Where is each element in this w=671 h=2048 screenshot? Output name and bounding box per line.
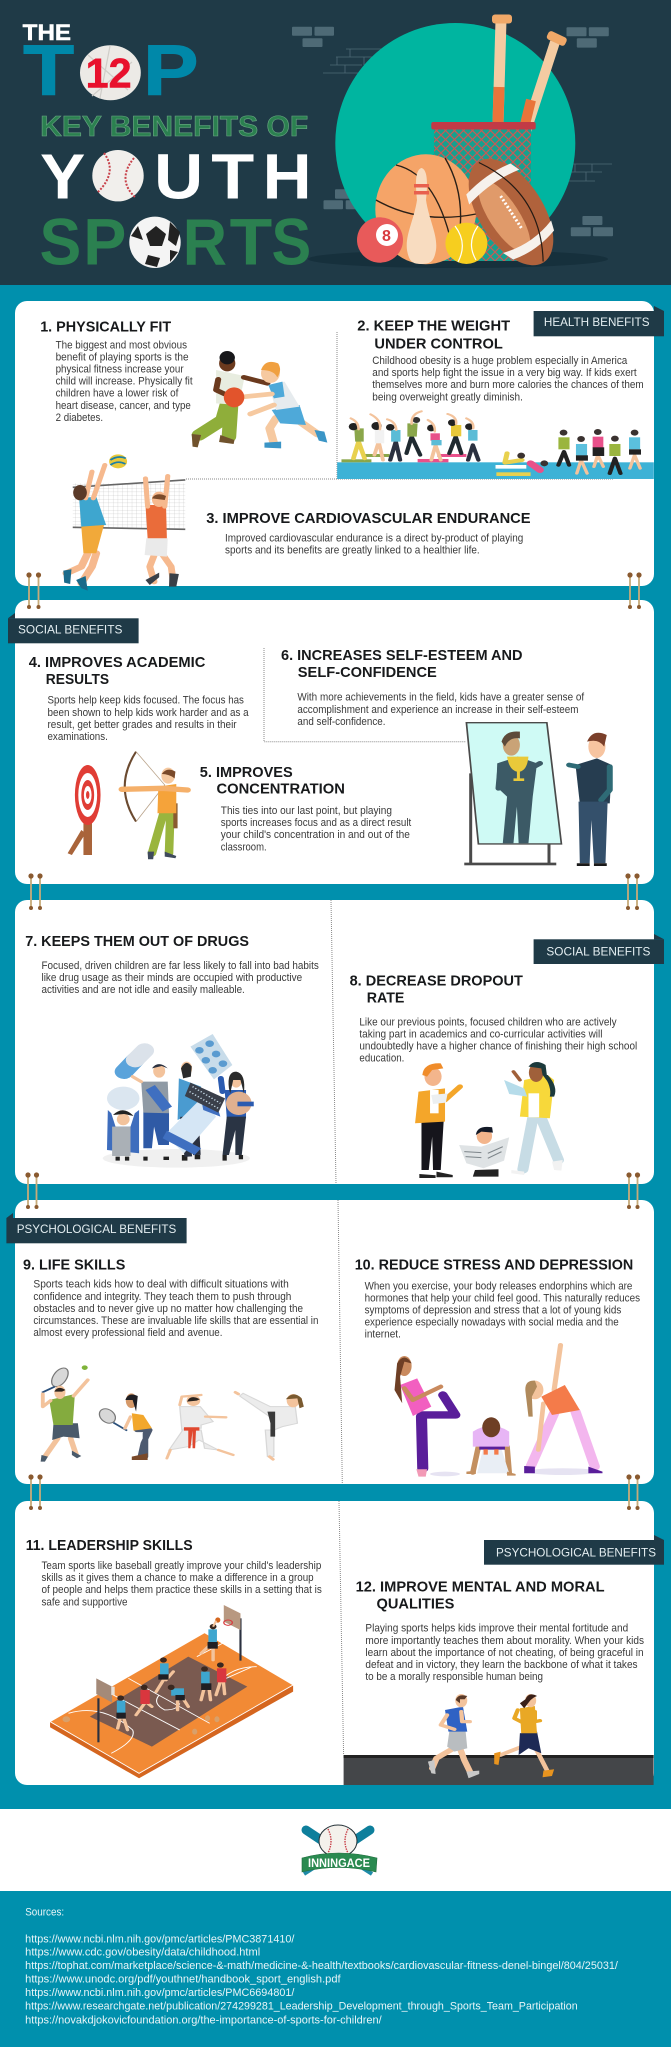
section tag: social benefits: SOCIAL BENEFITS bbox=[546, 945, 650, 959]
panel: health benefits bbox=[15, 301, 664, 591]
benefit 2 text: Childhood obesity is a huge problem especially in America bbox=[372, 355, 627, 367]
benefit 7 text bbox=[42, 960, 319, 996]
benefit 1 text: physical fitness increase your bbox=[56, 364, 184, 376]
benefit 6 text: and self-confidence. bbox=[297, 716, 386, 728]
benefit 4 text: result, get better grades and results in their bbox=[48, 719, 237, 731]
benefit 11 text: of people and helps them practice these skills in a setting that is bbox=[42, 1584, 322, 1596]
header background bbox=[0, 0, 671, 285]
panel: psychological benefits, 9 and 10 bbox=[6, 1200, 654, 1484]
benefit 4 heading bbox=[29, 654, 206, 688]
sources list: https://www.researchgate.net/publication/274299281_Leadership_Development_through_Sports_Team_Participation bbox=[25, 2001, 578, 2013]
title word: YOUTH: T bbox=[211, 141, 254, 213]
benefit 9 text: obstacles and to never give up no matter how challenging the bbox=[33, 1303, 303, 1315]
benefit 7 text: activities and are not idle and easily malleable. bbox=[42, 984, 245, 996]
benefit 10 heading: 10. REDUCE STRESS AND DEPRESSION bbox=[355, 1256, 633, 1273]
illustration: children stretching bbox=[395, 1345, 602, 1477]
wall bricks bbox=[292, 27, 613, 236]
benefit 10 text bbox=[365, 1280, 641, 1341]
benefit 5 text: your child's concentration in and out of the bbox=[221, 829, 410, 841]
benefit 4 text: Sports help keep kids focused. The focus has bbox=[48, 695, 244, 707]
sources footer bbox=[0, 1891, 671, 2047]
benefit 12 heading: 12. IMPROVE MENTAL AND MORAL bbox=[356, 1578, 605, 1595]
illustration: people carrying medication bbox=[103, 1034, 254, 1168]
benefit 8 text: education. bbox=[359, 1053, 404, 1065]
illustration: volleyball players bbox=[63, 454, 185, 591]
title word: YOUTH: H bbox=[263, 141, 312, 213]
title word: SPORTS bbox=[40, 205, 311, 279]
benefit 8 heading bbox=[350, 973, 523, 1007]
benefit 5 text: sports increases focus and as a direct result bbox=[221, 817, 411, 829]
benefit 1 text: The biggest and most obvious bbox=[56, 339, 188, 351]
illustration: group exercise on blue floor bbox=[337, 411, 654, 479]
benefit 1 text: benefit of playing sports is the bbox=[56, 351, 189, 363]
benefit 5 heading: 5. IMPROVES bbox=[200, 764, 293, 781]
benefit 8 text bbox=[359, 1016, 637, 1065]
benefit 9 text: circumstances. These are invaluable life skills that are essential in bbox=[33, 1315, 318, 1327]
title word: TOP: P bbox=[143, 32, 199, 111]
sources list: https://www.ncbi.nlm.nih.gov/pmc/articles/PMC6694801/ bbox=[25, 1987, 294, 1999]
section tag: psychological benefits bbox=[484, 1535, 664, 1565]
benefit 11 text: safe and supportive bbox=[42, 1596, 128, 1608]
benefit 5 heading bbox=[200, 764, 345, 798]
benefit 9 text: confidence and integrity. They teach them to push through bbox=[33, 1291, 291, 1303]
sources list bbox=[25, 1934, 618, 2026]
sources heading: Sources: bbox=[25, 1907, 64, 1919]
illustration: archer and target bbox=[68, 752, 187, 859]
panel: social benefits, 4 to 6 bbox=[8, 600, 654, 884]
benefit 12 text: to be a morally responsible human being bbox=[365, 1671, 543, 1683]
title word: TOP: 12 bbox=[86, 49, 132, 96]
sources list: https://www.unodc.org/pdf/youthnet/handbook_sport_english.pdf bbox=[25, 1974, 341, 1986]
benefit 9 text: Sports teach kids how to deal with difficult situations with bbox=[33, 1279, 289, 1291]
title word: YOUTH: U bbox=[154, 141, 203, 213]
benefit 5 text: This ties into our last point, but playing bbox=[221, 805, 392, 817]
basketball bbox=[375, 154, 476, 264]
logo: Inningace bbox=[302, 1825, 377, 1874]
illustration: isometric basketball court bbox=[50, 1605, 293, 1778]
main teal background bbox=[0, 285, 671, 1809]
benefit 1 text: 2 diabetes. bbox=[56, 412, 103, 424]
benefit 12 text: defeat and in victory, they learn the backbone of what it takes bbox=[365, 1659, 638, 1671]
benefit 7 heading: 7. KEEPS THEM OUT OF DRUGS bbox=[25, 933, 249, 950]
benefit 8 text: taking part in academics and co-curricular activities will bbox=[359, 1028, 602, 1040]
sources list: https://novakdjokovicfoundation.org/the-importance-of-sports-for-children/ bbox=[25, 2014, 382, 2026]
section tag: social benefits: SOCIAL BENEFITS bbox=[18, 622, 122, 636]
section tag: psychological benefits: PSYCHOLOGICAL BENEFITS bbox=[496, 1546, 656, 1560]
benefit 12 heading bbox=[356, 1578, 605, 1612]
benefit 6 heading: 6. INCREASES SELF-ESTEEM AND bbox=[281, 647, 523, 664]
benefit 11 text: skills as it gives them a chance to make a difference in a group bbox=[42, 1572, 314, 1584]
benefit 2 text bbox=[372, 355, 644, 403]
benefit 12 text: learn about the importance of not cheating, of being graceful in bbox=[365, 1647, 644, 1659]
benefit 12 heading: QUALITIES bbox=[376, 1595, 454, 1612]
benefit 5 text bbox=[221, 805, 411, 853]
benefit 12 text: more importantly teaches them about morality. When your kids bbox=[365, 1635, 645, 1647]
title word: TOP bbox=[23, 32, 199, 111]
benefit 1 text bbox=[56, 339, 193, 424]
illustration: tennis and karate kids bbox=[41, 1365, 304, 1462]
binder rings between panels bbox=[25, 572, 642, 1510]
benefit 9 text bbox=[33, 1279, 318, 1339]
running track ground bbox=[344, 1755, 654, 1785]
illustration: kids reading bbox=[415, 1062, 563, 1178]
title line: KEY BENEFITS OF: KEY BENEFITS OF bbox=[40, 111, 308, 143]
benefit 3 heading: 3. IMPROVE CARDIOVASCULAR ENDURANCE bbox=[206, 510, 531, 527]
benefit 2 text: being overweight greatly diminish. bbox=[372, 391, 523, 403]
benefit 5 heading: CONCENTRATION bbox=[216, 781, 345, 798]
benefit 6 heading bbox=[281, 647, 523, 681]
benefit 10 text: internet. bbox=[365, 1329, 401, 1341]
benefit 8 text: undoubtedly have a higher chance of finishing their high school bbox=[359, 1040, 637, 1052]
benefit 3 text: sports and its benefits are greatly linked to a healthier life. bbox=[225, 545, 480, 557]
benefit 6 heading: SELF-CONFIDENCE bbox=[298, 664, 437, 681]
benefit 7 text: Focused, driven children are far less likely to fall into bad habits bbox=[42, 960, 319, 972]
benefit 4 heading: RESULTS bbox=[46, 671, 109, 688]
benefit 2 heading: UNDER CONTROL bbox=[374, 335, 503, 352]
benefit 4 text bbox=[48, 695, 249, 743]
title word: YOUTH bbox=[40, 141, 312, 213]
bowling pin bbox=[407, 168, 436, 264]
tennis ball bbox=[445, 223, 487, 264]
benefit 10 text: symptoms of depression and stress that a lot of young kids bbox=[365, 1304, 622, 1316]
benefit 9 text: almost every professional field and avenue. bbox=[33, 1327, 223, 1339]
benefit 1 text: children have a lower risk of bbox=[56, 388, 179, 400]
benefit 8 heading: RATE bbox=[367, 990, 404, 1007]
benefit 2 text: and sports help fight the issue in a very big way. If kids exert bbox=[372, 367, 637, 379]
section tag: health benefits bbox=[534, 306, 664, 336]
football bbox=[451, 144, 571, 280]
benefit 4 text: examinations. bbox=[48, 731, 108, 743]
section tag: psychological benefits bbox=[6, 1213, 187, 1243]
title word: SPORTS: T bbox=[230, 205, 272, 279]
title word: THE: THE bbox=[23, 20, 71, 45]
benefit 9 heading: 9. LIFE SKILLS bbox=[23, 1257, 125, 1274]
section tag: psychological benefits: PSYCHOLOGICAL BENEFITS bbox=[17, 1222, 176, 1236]
benefit 2 heading bbox=[357, 318, 510, 352]
benefit 4 text: been shown to help kids work harder and as a bbox=[48, 707, 249, 719]
benefit 7 text: like drug usage as their minds are occupied with productive bbox=[42, 972, 302, 984]
ground shadow bbox=[308, 250, 608, 268]
benefit 8 text: Like our previous points, focused children who are actively bbox=[359, 1016, 617, 1028]
benefit 4 heading: 4. IMPROVES ACADEMIC bbox=[29, 654, 206, 671]
teal circle bbox=[335, 23, 575, 263]
benefit 10 text: When you exercise, your body releases endorphins which are bbox=[365, 1280, 632, 1292]
title bbox=[23, 20, 312, 279]
benefit 1 text: child will increase. Physically fit bbox=[56, 376, 193, 388]
benefit 10 text: hormones that help your child feel good. This naturally reduces bbox=[365, 1292, 641, 1304]
title word: SPORTS: S bbox=[40, 205, 81, 279]
logo: Inningace: INNINGACE bbox=[308, 1856, 370, 1870]
benefit 11 heading: 11. LEADERSHIP SKILLS bbox=[26, 1537, 193, 1554]
section tag: social benefits bbox=[8, 613, 139, 643]
benefit 1 text: heart disease, cancer, and type bbox=[56, 400, 191, 412]
title word: SPORTS: S bbox=[272, 205, 311, 279]
benefit 11 text: Team sports like baseball greatly improve your child's leadership bbox=[42, 1560, 321, 1572]
title word: SPORTS: P bbox=[83, 205, 126, 279]
benefit 6 text: With more achievements in the field, kids have a greater sense of bbox=[297, 692, 585, 704]
8 ball bbox=[357, 217, 403, 263]
benefit 3 text bbox=[225, 533, 523, 557]
title word: TOP: T bbox=[23, 32, 74, 111]
benefit 5 text: classroom. bbox=[221, 841, 267, 853]
sources list: https://tophat.com/marketplace/science-&-math/medicine-&-health/textbooks/cardiovascular-fitness-denel-bingel/804/25031/ bbox=[25, 1960, 618, 1972]
title word: YOUTH: Y bbox=[40, 141, 85, 213]
benefit 3 text: Improved cardiovascular endurance is a direct by-product of playing bbox=[225, 533, 523, 545]
illustration: two runners bbox=[428, 1694, 554, 1778]
bats bbox=[492, 14, 568, 165]
benefit 1 heading: 1. PHYSICALLY FIT bbox=[40, 318, 171, 335]
mesh basket bbox=[431, 122, 536, 261]
illustration: sports equipment in basket bbox=[292, 14, 613, 280]
benefit 12 text bbox=[365, 1623, 645, 1683]
panel: benefits 7 and 8 bbox=[15, 900, 664, 1184]
illustration: boy and trophy in mirror bbox=[464, 723, 612, 866]
title word: SPORTS: R bbox=[183, 205, 227, 279]
benefit 6 text bbox=[297, 692, 585, 728]
section tag: social benefits bbox=[534, 934, 664, 964]
benefit 8 heading: 8. DECREASE DROPOUT bbox=[350, 973, 523, 990]
section tag: health benefits: HEALTH BENEFITS bbox=[544, 315, 650, 329]
benefit 2 text: themselves more and burn more calories the chances of them bbox=[372, 379, 644, 391]
panel: benefits 11 and 12 bbox=[15, 1501, 664, 1785]
8 ball: 8 bbox=[382, 228, 391, 245]
sources list: https://www.cdc.gov/obesity/data/childhood.html bbox=[25, 1947, 260, 1959]
benefit 2 heading: 2. KEEP THE WEIGHT bbox=[357, 318, 510, 335]
benefit 11 text bbox=[42, 1560, 322, 1608]
benefit 10 text: experience especially nowadays with social media and the bbox=[365, 1317, 619, 1329]
benefit 6 text: accomplishment and experience an increase in their self-esteem bbox=[297, 704, 579, 716]
sources list: https://www.ncbi.nlm.nih.gov/pmc/articles/PMC3871410/ bbox=[25, 1934, 294, 1946]
benefit 12 text: Playing sports helps kids improve their mental fortitude and bbox=[365, 1623, 628, 1635]
illustration: two kids with basketball bbox=[192, 351, 327, 448]
